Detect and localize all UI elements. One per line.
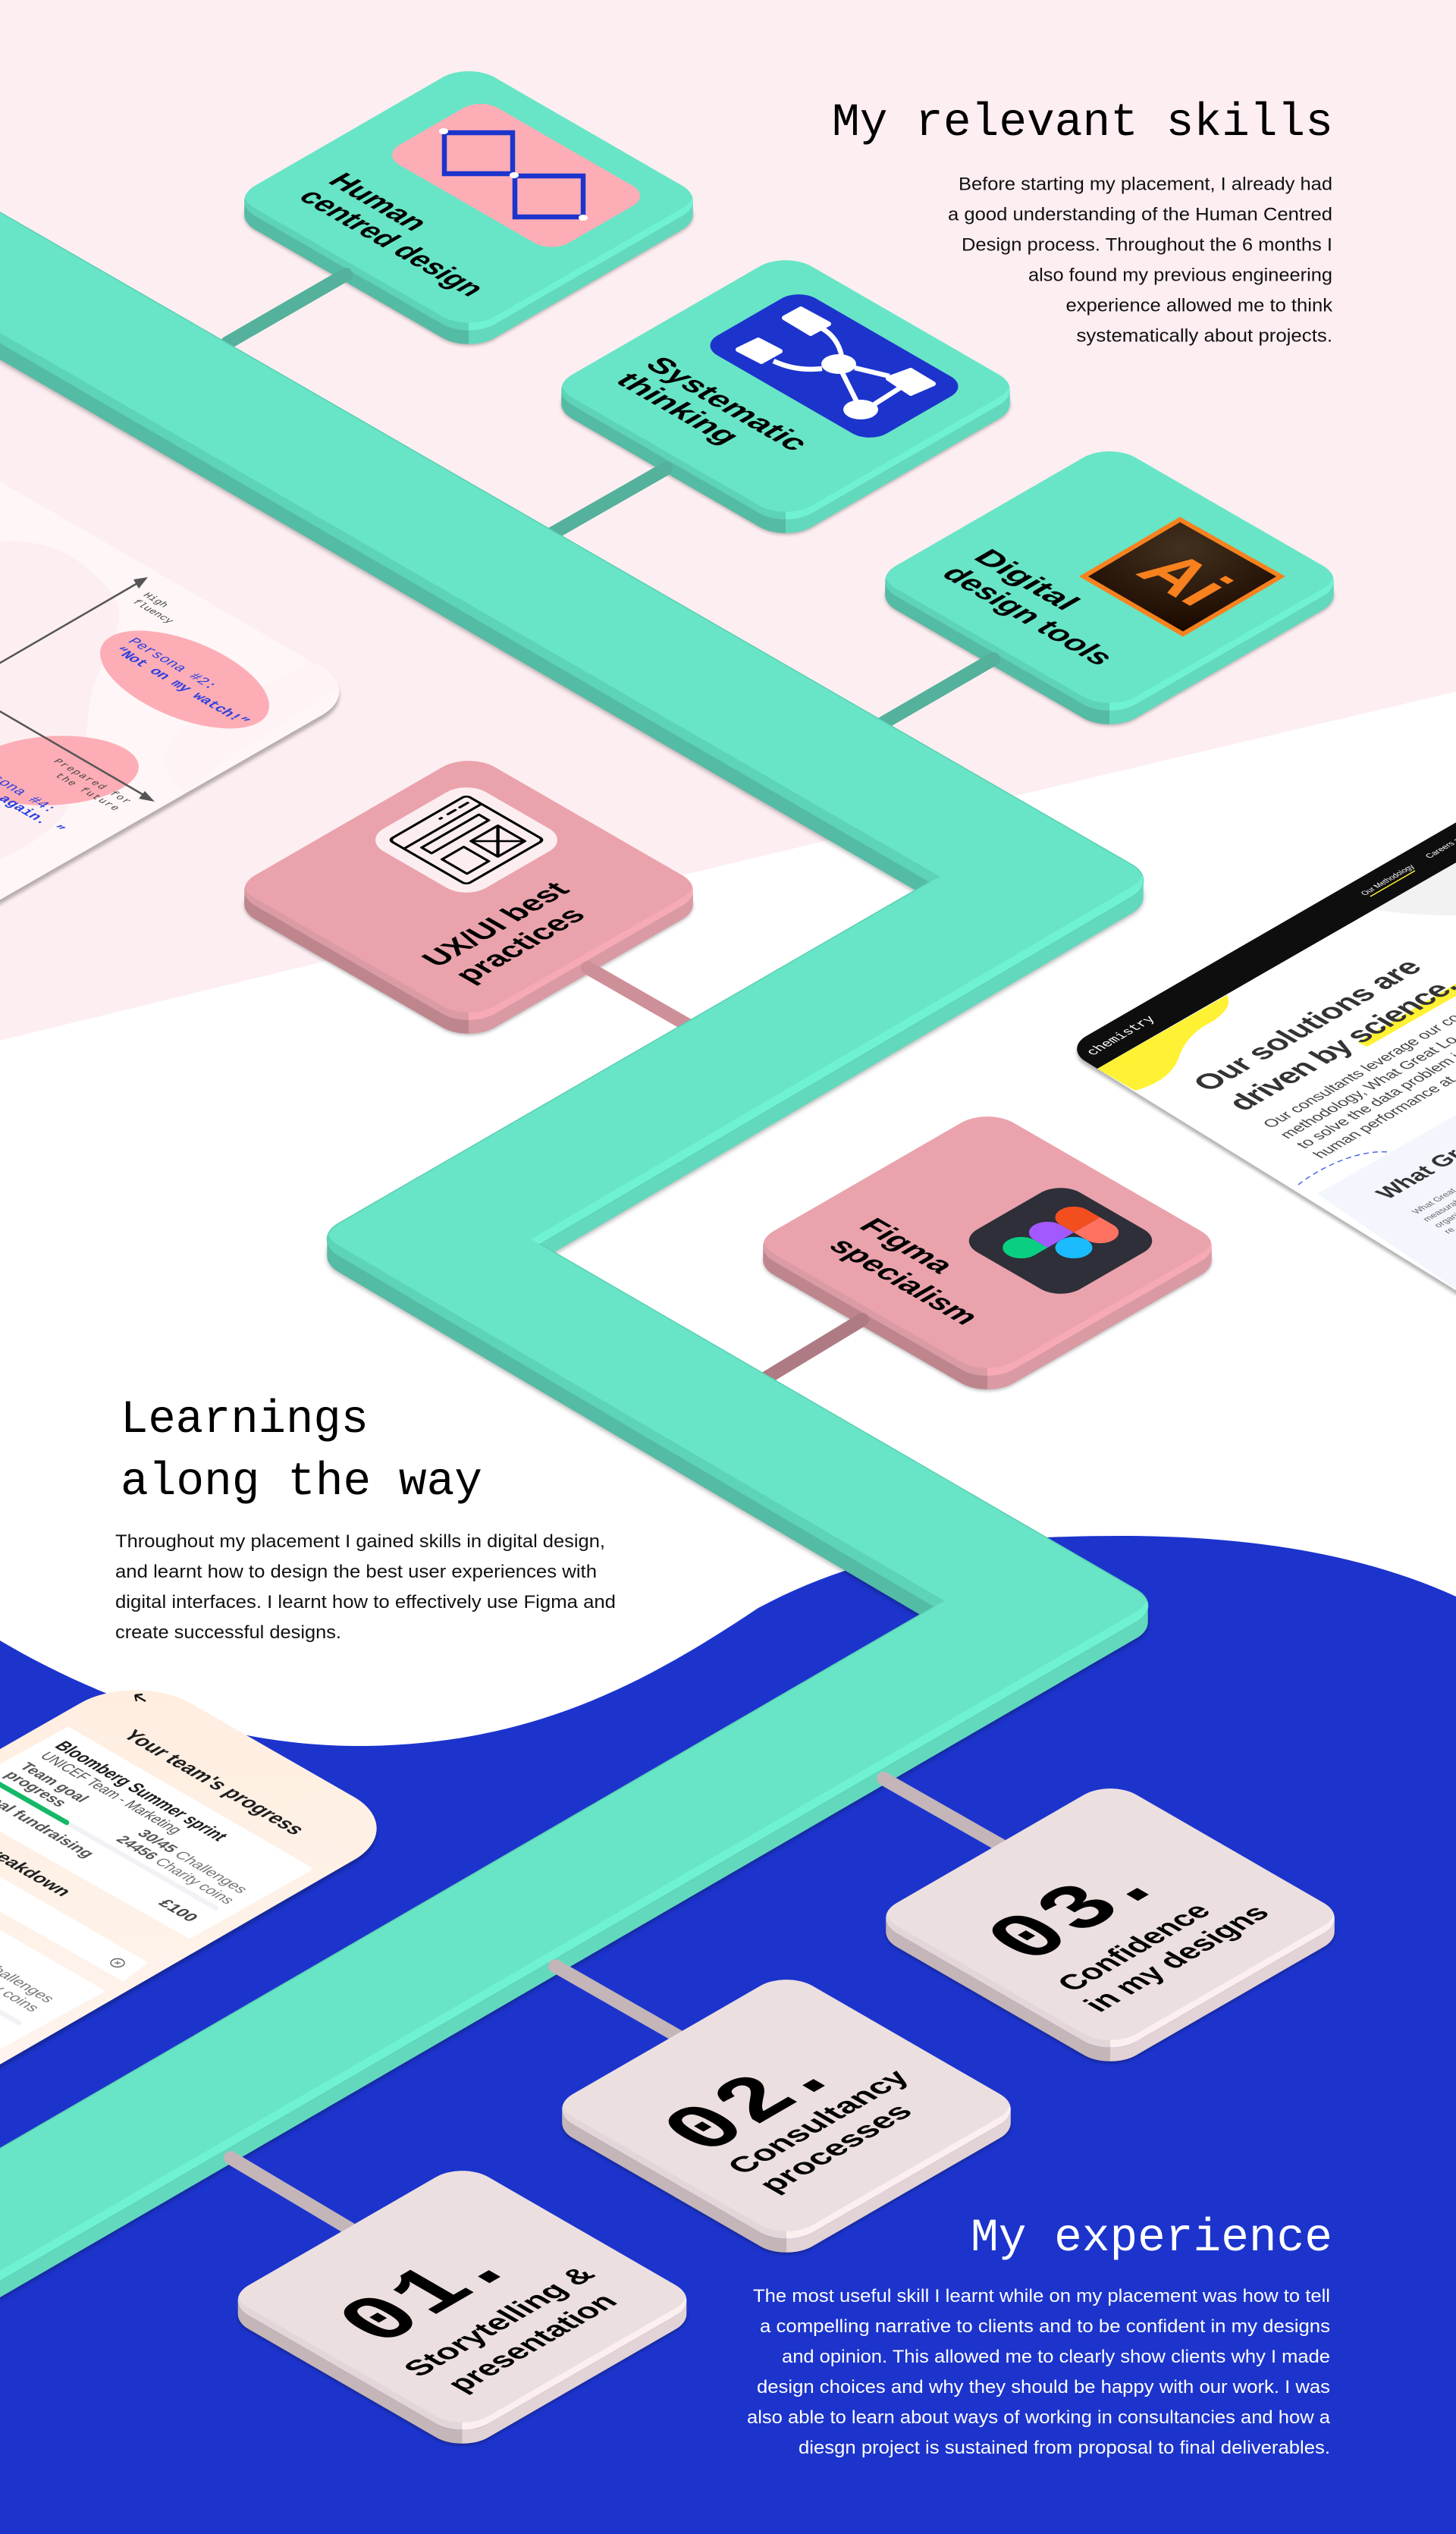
icon: illustrator logo bbox=[1084, 520, 1281, 634]
connector: figma bbox=[762, 1320, 862, 1380]
grey corner shape bbox=[1375, 862, 1456, 915]
card label: in my designs bbox=[1077, 1901, 1277, 2017]
number 02: 02. bbox=[642, 2036, 870, 2168]
card: 01 storytelling and presentation bbox=[220, 2149, 705, 2452]
connector: experience 03 bbox=[883, 1779, 1005, 1848]
card label: Figma bbox=[852, 1214, 962, 1278]
text block: learnings: digital interfaces. I learnt how to effectively use Figma and bbox=[115, 1592, 616, 1612]
background: blue lower wave bbox=[0, 1536, 1456, 2534]
text block: experience: also able to learn about ways of working in consultancies and how a bbox=[747, 2407, 1331, 2428]
card: 02 consultancy processes bbox=[544, 1958, 1029, 2261]
icon: figma logo bbox=[958, 1182, 1163, 1300]
panel: team progress app card bbox=[0, 1690, 377, 2086]
panel: chemistry website card bbox=[1062, 809, 1456, 1308]
text block: learnings bbox=[115, 1531, 616, 1643]
add icon bbox=[111, 1958, 124, 1967]
card: human centred design bbox=[226, 49, 711, 353]
persona 2 label: Persona #2: bbox=[124, 636, 221, 692]
amount: £100 bbox=[155, 1897, 202, 1924]
card label: centred design bbox=[291, 184, 492, 301]
text block: skills intro bbox=[948, 174, 1333, 346]
white lower tile bbox=[0, 1927, 102, 2052]
card label: UX/UI best bbox=[415, 878, 577, 972]
team name: UNICEF Team - Marketing bbox=[36, 1750, 186, 1836]
science highlight bbox=[1357, 984, 1456, 1047]
card: 03 confidence in my designs bbox=[868, 1766, 1353, 2070]
persona 2 label: “Not on my watch!” bbox=[109, 645, 253, 728]
chart lower right blob bbox=[165, 661, 341, 793]
persona 2 bubble bbox=[100, 631, 269, 728]
challenges count: 24456 Charity coins bbox=[112, 1833, 238, 1907]
yellow blob bbox=[1097, 995, 1228, 1091]
lower tile bar bbox=[0, 2010, 19, 2023]
axis label high fluency: High bbox=[140, 592, 171, 610]
axis arrow down bbox=[0, 709, 155, 802]
card label: Confidence bbox=[1050, 1898, 1218, 1996]
text block: experience: diesgn project is sustained from proposal to final deliverables. bbox=[799, 2438, 1330, 2458]
card label: Digital bbox=[966, 545, 1087, 615]
icon: illustrator logo: Ai bbox=[1121, 542, 1248, 616]
background: pink upper area bbox=[0, 0, 1456, 1041]
sprint name: Bloomberg Summer sprint bbox=[50, 1738, 233, 1844]
panel: persona chart card bbox=[0, 577, 341, 906]
card label: practices bbox=[447, 903, 593, 988]
challenges count: 30/45 Challenges bbox=[133, 1827, 252, 1896]
text block: experience: and opinion. This allowed me to clearly show clients why I made bbox=[782, 2347, 1330, 2367]
text block: learnings: create successful designs. bbox=[115, 1622, 341, 1643]
card label: Consultancy bbox=[720, 2065, 917, 2179]
text block: learnings: and learnt how to design the best user experiences with bbox=[115, 1562, 597, 1582]
text block: experience: a compelling narrative to clients and to be confident in my designs bbox=[760, 2316, 1330, 2337]
heading: learnings along the way bbox=[121, 1394, 482, 1509]
card label: processes bbox=[752, 2099, 920, 2197]
text block: learnings: Throughout my placement I gained skills in digital design, bbox=[115, 1531, 605, 1552]
team goal label: progress bbox=[1, 1769, 71, 1810]
text block: experience bbox=[747, 2286, 1331, 2458]
progress bar bbox=[0, 1782, 216, 1908]
white add tile bbox=[0, 1874, 146, 1980]
text block: skills intro: experience allowed me to think bbox=[1066, 296, 1333, 316]
text block: skills intro: systematically about projects. bbox=[1077, 326, 1332, 346]
nav link: Our Methodology bbox=[1359, 863, 1417, 897]
axis arrow up bbox=[0, 577, 148, 665]
connector: human centred design bbox=[228, 275, 346, 343]
card label: presentation bbox=[440, 2289, 625, 2397]
card: figma specialism bbox=[745, 1094, 1230, 1398]
connector: systematic thinking bbox=[549, 469, 666, 535]
black nav bar bbox=[1062, 809, 1456, 1069]
heading: learnings along the way: Learnings bbox=[121, 1394, 369, 1446]
text block: skills intro: Before starting my placement, I already had bbox=[959, 174, 1332, 194]
white summary tile bbox=[0, 1729, 309, 1936]
icon: network diagram bbox=[700, 288, 968, 443]
connector: experience 02 bbox=[555, 1966, 686, 2041]
persona 4 bubble bbox=[0, 736, 139, 805]
card label: Systematic bbox=[638, 352, 817, 456]
text block: skills intro: also found my previous engineering bbox=[1028, 265, 1332, 285]
chart background blob bbox=[0, 541, 119, 862]
team goal label: Team goal bbox=[16, 1760, 93, 1805]
heading: my relevant skills: My relevant skills bbox=[832, 97, 1333, 149]
text block: skills intro: Design process. Throughout the 6 months I bbox=[962, 235, 1332, 255]
website heading: Our solutions are bbox=[1186, 955, 1429, 1096]
app title: Your team's progress bbox=[118, 1726, 311, 1838]
number 01: 01. bbox=[317, 2228, 545, 2360]
axis label prepared for the future: the future bbox=[52, 772, 121, 813]
card: ux ui best practices bbox=[226, 739, 711, 1042]
heading: learnings along the way: along the way bbox=[121, 1456, 482, 1509]
card label: design tools bbox=[934, 561, 1122, 670]
text block: skills intro: a good understanding of the Human Centred bbox=[948, 205, 1332, 225]
card label: thinking bbox=[608, 368, 748, 449]
icon: browser wireframe bbox=[364, 781, 569, 900]
card: digital design tools bbox=[867, 429, 1352, 733]
number 03: 03. bbox=[965, 1845, 1194, 1977]
heading: my experience: My experience bbox=[971, 2212, 1332, 2265]
card: systematic thinking bbox=[543, 238, 1028, 542]
connector: digital design tools bbox=[883, 659, 993, 723]
axis label high fluency: fluency bbox=[129, 598, 176, 626]
light blue section bbox=[1317, 1115, 1456, 1289]
card label: Storytelling & bbox=[397, 2262, 603, 2382]
axis label prepared for the future: Prepared for bbox=[50, 758, 133, 806]
what great text bbox=[1409, 1187, 1456, 1235]
teal timeline ribbon bbox=[0, 190, 1148, 2319]
text block: experience: The most useful skill I learnt while on my placement was how to tell bbox=[753, 2286, 1330, 2306]
icon: two linked squares bbox=[382, 98, 650, 253]
back arrow bbox=[135, 1694, 146, 1701]
dashed arc bbox=[1298, 1152, 1390, 1185]
website paragraph: human performance at bbox=[1309, 1074, 1456, 1161]
connector: ux ui bbox=[588, 968, 698, 1031]
text block: experience: design choices and why they should be happy with our work. I was bbox=[757, 2377, 1330, 2397]
chemistry logo: chemistry bbox=[1084, 1014, 1160, 1058]
card label: specialism bbox=[821, 1233, 987, 1330]
card label: Human bbox=[321, 168, 436, 235]
connector: experience 01 bbox=[231, 2158, 354, 2231]
